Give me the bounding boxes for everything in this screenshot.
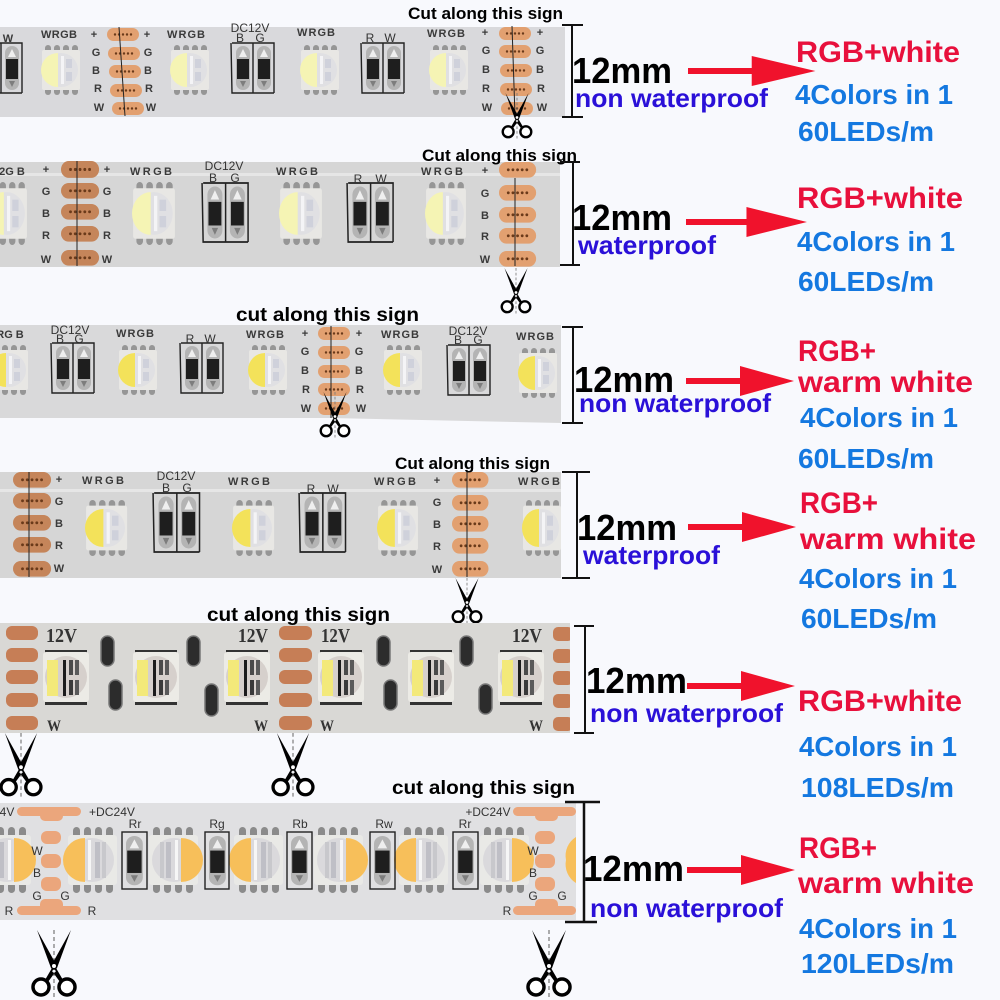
strip 4 board labels: DC12V xyxy=(157,469,195,483)
strip 1 board labels: WRGB xyxy=(427,28,465,40)
strip 3 board labels: DC12V xyxy=(449,324,487,338)
strip 2 board labels: B xyxy=(103,208,111,220)
spec text strip 6: 120LEDs/m xyxy=(801,948,954,979)
waterproof text strip 5: non waterproof xyxy=(590,698,783,728)
strip 5 board labels: 12V xyxy=(512,625,542,647)
cut label strip 1: Cut along this sign xyxy=(408,4,563,23)
strip 1 board labels: + xyxy=(482,27,488,39)
strip 2 board labels xyxy=(0,159,491,266)
strip 1 board labels: G xyxy=(536,45,544,57)
width bracket strip 5 xyxy=(574,626,594,733)
strip 6 board labels: R xyxy=(5,904,14,918)
strip 3 board labels: WRGB xyxy=(381,329,419,341)
strip 1 board labels: G xyxy=(255,31,265,45)
strip 3 board labels: R xyxy=(356,384,364,396)
strip 2 board labels: W xyxy=(480,254,491,266)
strip 6 board labels: +DC24V xyxy=(89,805,135,819)
strip 3 board labels: WRGB xyxy=(516,331,554,343)
strip 2 board labels: G xyxy=(230,171,240,185)
strip 4 board labels: B xyxy=(162,481,170,495)
strip 2 board labels: WRGB xyxy=(130,166,172,178)
strip 1 board labels: + xyxy=(144,29,150,41)
waterproof text strip 6: non waterproof xyxy=(590,893,783,923)
strip 1 board labels: R xyxy=(482,83,490,95)
icon: scissors strip 1 xyxy=(503,93,531,139)
strip 3 board labels: B xyxy=(454,333,462,347)
spec text strip 5 xyxy=(798,685,962,803)
strip 2 board labels: WRGB xyxy=(276,166,318,178)
spec text strip 5: 108LEDs/m xyxy=(801,772,954,803)
strip 3 board labels: B xyxy=(301,365,309,377)
strip 4 board labels: R xyxy=(433,541,441,553)
spec text strip 5: RGB+white xyxy=(798,685,962,718)
strip 1 board labels: B xyxy=(92,65,100,77)
strip 1 board labels: WRGB xyxy=(167,29,205,41)
strip 6 board labels: G xyxy=(557,889,567,903)
strip 2 board labels: W xyxy=(102,254,113,266)
strip 1 board labels: G xyxy=(482,45,490,57)
strip 5 solder pads xyxy=(6,626,573,731)
strip 5 board labels: W xyxy=(254,718,268,735)
width bracket strip 2 xyxy=(560,162,580,265)
strip 1 board labels: W xyxy=(537,102,548,114)
cut label strip 6: cut along this sign xyxy=(392,778,575,799)
size text strip 3: 12mm xyxy=(574,359,674,400)
strip 2 board labels: WRGB xyxy=(421,166,463,178)
strip 5 board labels: 12V xyxy=(46,625,77,647)
strip 4 board labels: W xyxy=(432,564,443,576)
strip 6 board labels: R xyxy=(503,904,512,918)
strip 6 board labels: B xyxy=(529,866,537,880)
strip 4 board xyxy=(0,472,561,578)
strip 6 board labels: B xyxy=(33,866,41,880)
spec text strip 6: warm white xyxy=(797,867,974,900)
size text strip 4: 12mm xyxy=(577,507,677,548)
strip 2 board labels: W xyxy=(375,172,387,186)
strip 5 LEDs and resistors xyxy=(43,636,544,716)
spec text strip 2: 4Colors in 1 xyxy=(797,226,955,257)
strip 1 board labels: W xyxy=(146,102,157,114)
strip 6 board labels: W xyxy=(527,844,539,858)
spec text strip 2: RGB+white xyxy=(797,182,963,215)
strip 4 board labels: R xyxy=(55,540,63,552)
strip 5 board labels xyxy=(46,625,543,735)
strip 4 board labels: WRGB xyxy=(374,476,416,488)
strip 1 board labels: WRGB xyxy=(297,27,335,39)
strip 2 board labels: W xyxy=(41,254,52,266)
icon: scissors strip 4 xyxy=(453,578,481,624)
spec text strip 6: RGB+ xyxy=(799,832,877,865)
spec text strip 4 xyxy=(799,487,976,634)
strip 3 board labels: W xyxy=(301,403,312,415)
spec text strip 1: 60LEDs/m xyxy=(798,116,934,147)
strip 3 board labels: W xyxy=(356,403,367,415)
strip 2 board xyxy=(0,162,560,267)
strip 5 board xyxy=(0,623,570,733)
size text strip 5: 12mm xyxy=(586,660,687,701)
strip 2 board labels: + xyxy=(482,165,488,177)
strip 1 board labels: WRGB xyxy=(41,29,77,41)
strip 1 board labels: + xyxy=(537,27,543,39)
strip 3 board labels: B xyxy=(56,332,64,346)
strip 3 LEDs and resistors xyxy=(0,343,557,398)
strip 2 board labels: B xyxy=(209,171,217,185)
strip 2 board labels: G xyxy=(103,186,111,198)
arrow strip 2 xyxy=(686,207,807,237)
strip 6 board labels: Rr xyxy=(459,817,471,831)
strip 2 board labels: R xyxy=(103,230,111,242)
strip 3 board labels: + xyxy=(356,328,362,340)
spec text strip 3 xyxy=(797,335,973,474)
panel: strip 4 RGB+warm white waterproof xyxy=(0,454,976,634)
strip 6 board labels xyxy=(0,805,567,918)
spec text strip 4: 60LEDs/m xyxy=(801,603,937,634)
strip 3 board labels: R xyxy=(302,384,310,396)
strip 1 board labels: B xyxy=(536,64,544,76)
strip 3 board labels: G xyxy=(355,346,363,358)
strip 6 board labels: Rb xyxy=(292,817,308,831)
strip 1 board labels: G xyxy=(144,47,152,59)
panel: strip 2 RGB+white waterproof xyxy=(0,146,963,314)
strip 4 board labels: W xyxy=(54,563,65,575)
strip 2 board labels: G xyxy=(481,188,489,200)
strip 1 board labels: W xyxy=(482,102,493,114)
width bracket strip 6 xyxy=(565,802,600,922)
icon: scissors strip 2 xyxy=(502,268,530,314)
strip 1 LEDs and resistors xyxy=(0,43,468,95)
size text strip 1: 12mm xyxy=(572,50,672,91)
strip 6 board labels: 4V xyxy=(0,805,14,819)
strip 3 board labels: DC12V xyxy=(51,323,89,337)
strip 2 solder pads xyxy=(61,161,536,267)
spec text strip 1: RGB+white xyxy=(796,36,960,69)
spec text strip 2 xyxy=(797,182,963,297)
icons: scissors strip 6 xyxy=(33,930,570,998)
strip 3 board labels: B xyxy=(355,365,363,377)
strip 4 board labels: WRGB xyxy=(228,476,270,488)
panel: strip 6 RGB+warm white 120 LEDs xyxy=(0,778,974,998)
strip 1 board labels: R xyxy=(366,31,375,45)
strip 4 board labels: + xyxy=(434,475,440,487)
strip 6 solder pads xyxy=(17,807,576,915)
strip 6 board labels: R xyxy=(88,904,97,918)
width bracket strip 3 xyxy=(562,327,583,423)
arrow strip 6 xyxy=(687,855,795,885)
strip 4 board labels: G xyxy=(182,481,192,495)
arrow strip 3 xyxy=(686,366,794,396)
strip 6 board labels: G xyxy=(60,889,70,903)
strip 1 board labels: R xyxy=(145,83,153,95)
cut label strip 3: cut along this sign xyxy=(236,305,419,326)
panel: strip 3 RGB+warm white non waterproof xyxy=(0,305,973,474)
strip 2 board labels: R xyxy=(354,172,363,186)
panel: strip 1 RGB+white non waterproof xyxy=(0,4,960,147)
strip 3 board labels: WRGB xyxy=(116,328,154,340)
strip 4 solder pads xyxy=(13,472,488,577)
strip 2 board labels: B xyxy=(481,210,489,222)
strip 1 solder pads xyxy=(107,26,533,116)
spec text strip 3: 60LEDs/m xyxy=(798,443,934,474)
spec text strip 2: 60LEDs/m xyxy=(798,266,934,297)
strip 6 board labels: W xyxy=(31,844,43,858)
strip 5 board labels: 12V xyxy=(238,625,268,647)
spec text strip 6: 4Colors in 1 xyxy=(799,913,957,944)
strip 3 board labels: G xyxy=(473,333,483,347)
strip 1 board labels: R xyxy=(537,83,545,95)
strip 2 board labels: G xyxy=(42,186,50,198)
size text strip 6: 12mm xyxy=(583,848,684,889)
strip 1 board labels: DC12V xyxy=(231,21,269,35)
spec text strip 3: 4Colors in 1 xyxy=(800,402,958,433)
strip 4 board labels xyxy=(54,469,560,576)
spec text strip 5: 4Colors in 1 xyxy=(799,731,957,762)
strip 5 board labels: W xyxy=(47,718,61,735)
strip 6 board labels: G xyxy=(32,889,42,903)
strip 4 board labels: W xyxy=(327,482,339,496)
spec text strip 1 xyxy=(795,36,960,147)
strip 1 board xyxy=(0,27,565,117)
strip 6 board labels: +DC24V xyxy=(466,805,510,819)
strip 6 board labels: Rg xyxy=(209,817,225,831)
strip 4 board labels: WRGB xyxy=(518,476,560,488)
strip 1 board labels: W xyxy=(3,33,14,45)
spec text strip 3: warm white xyxy=(797,366,973,399)
strip 6 board xyxy=(0,803,576,920)
strip 6 board labels: Rw xyxy=(375,817,393,831)
spec text strip 4: 4Colors in 1 xyxy=(799,563,957,594)
strip 1 board labels: G xyxy=(92,47,100,59)
spec text strip 3: RGB+ xyxy=(798,335,876,368)
strip 3 board labels xyxy=(0,323,554,415)
strip 2 LEDs and resistors xyxy=(0,182,466,245)
strip 1 board labels: W xyxy=(94,102,105,114)
strip 3 board labels: G xyxy=(74,332,84,346)
icon: scissors strip 3 xyxy=(321,392,349,438)
strip 4 LEDs and resistors xyxy=(85,493,561,556)
strip 3 board labels: WRGB xyxy=(246,329,284,341)
strip 1 board labels: B xyxy=(236,31,244,45)
strip 6 board labels: Rr xyxy=(129,817,141,831)
strip 3 board labels: W xyxy=(204,332,216,346)
spec text strip 6 xyxy=(797,832,974,979)
strip 3 board xyxy=(0,325,561,423)
arrow strip 1 xyxy=(688,56,815,86)
width bracket strip 4 xyxy=(562,472,590,578)
strip 5 board labels: W xyxy=(529,718,543,735)
strip 4 board labels: B xyxy=(433,519,441,531)
waterproof text strip 4: waterproof xyxy=(582,540,720,570)
waterproof text strip 3: non waterproof xyxy=(579,388,771,418)
strip 4 board labels: + xyxy=(56,474,62,486)
strip 4 board labels: G xyxy=(433,497,441,509)
arrow strip 4 xyxy=(688,512,796,542)
strip 3 board labels: + xyxy=(302,328,308,340)
strip 5 board labels: 12V xyxy=(321,625,350,647)
width bracket strip 1 xyxy=(562,25,583,117)
waterproof text strip 1: non waterproof xyxy=(575,83,768,113)
strip 3 board labels: G xyxy=(301,346,309,358)
strip 6 board labels: G xyxy=(528,889,538,903)
strip 1 board labels: R xyxy=(94,83,102,95)
strip 4 board labels: G xyxy=(55,496,63,508)
spec text strip 4: RGB+ xyxy=(800,487,878,520)
strip 2 board labels: R xyxy=(42,230,50,242)
strip 1 board labels: B xyxy=(482,64,490,76)
strip 4 board labels: B xyxy=(55,518,63,530)
strip 5 board labels: W xyxy=(320,718,334,735)
strip 6 LEDs and resistors xyxy=(0,827,576,893)
strip 2 board labels: + xyxy=(104,164,110,176)
panel: strip 5 RGB+white 108 LEDs xyxy=(0,605,962,803)
strip 2 board labels: DC12V xyxy=(205,159,243,173)
cut label strip 2: Cut along this sign xyxy=(422,146,577,165)
strip 3 board labels: R xyxy=(186,332,195,346)
strip 1 board labels: W xyxy=(384,31,396,45)
spec text strip 1: 4Colors in 1 xyxy=(795,79,953,110)
strip 1 board labels: B xyxy=(144,65,152,77)
spec text strip 4: warm white xyxy=(799,523,976,556)
icons: scissors strip 5 xyxy=(1,733,313,798)
strip 4 board labels: WRGB xyxy=(82,475,124,487)
strip 1 board labels xyxy=(3,21,548,114)
waterproof text strip 2: waterproof xyxy=(577,230,716,260)
strip 1 board labels: + xyxy=(91,29,97,41)
arrow strip 5 xyxy=(687,671,795,701)
strip 4 board labels: R xyxy=(307,482,316,496)
cut label strip 5: cut along this sign xyxy=(207,605,390,626)
size text strip 2: 12mm xyxy=(572,197,672,238)
strip 3 solder pads xyxy=(318,326,350,418)
strip 2 board labels: R xyxy=(481,231,489,243)
cut label strip 4: Cut along this sign xyxy=(395,454,550,473)
strip 2 board labels: B xyxy=(42,208,50,220)
strip 2 board labels: + xyxy=(43,164,49,176)
